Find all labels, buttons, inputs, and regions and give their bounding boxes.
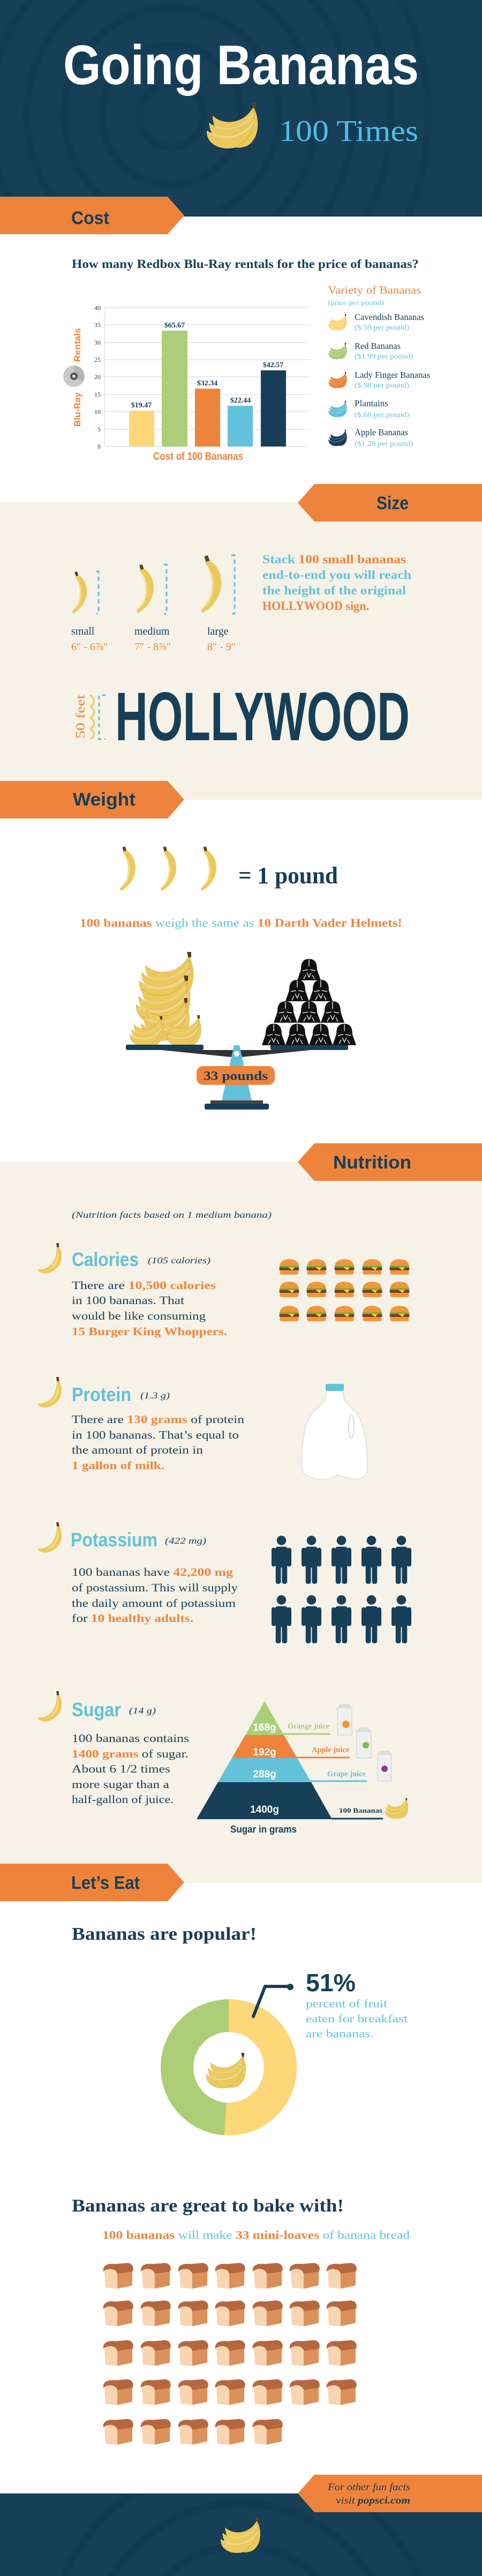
panel: potassium: 100 bananas have 42,200 mg [72,1566,234,1579]
three bananas = 1 pound [120,846,338,890]
chart: sugar pyramid: Sugar in grams [230,1824,297,1835]
callout: 51%: eaten for breakfast [306,2012,408,2025]
legend: variety of bananas: ($.98 per pound) [355,382,409,390]
panel: calories: (105 calories) [148,1255,210,1265]
banner: cost [0,197,184,234]
text: darth vader comparison: 100 bananas weigh the same as 10 Darth Vader Helmets! [80,916,402,929]
panel: sugar: About 6 1/2 times [72,1762,170,1775]
chart: sugar pyramid: Orange juice [288,1722,329,1731]
banner: size: Size [376,493,409,513]
icon: milk jug [302,1384,367,1479]
banner: weight: Weight [73,790,135,810]
banana sizes: 7″ - 8⅞″ [134,641,171,653]
bar chart: 15 [94,391,101,398]
panel: protein: the amount of protein in [72,1443,204,1456]
text: stack 100 small bananas: HOLLYWOOD sign. [262,599,369,613]
banana sizes: small [71,626,95,637]
panel: protein: (1.3 g) [140,1390,170,1401]
heading: bake: Bananas are great to bake with! [72,2196,344,2216]
banana sizes: medium [134,626,170,637]
chart: sugar pyramid: 288g [253,1769,276,1780]
hollywood sign: 50 feet [74,695,88,739]
text: stack 100 small bananas: end-to-end you will reach [262,568,411,582]
panel: sugar: (14 g) [129,1706,156,1716]
chart: sugar pyramid: 192g [253,1747,276,1758]
banner: footer source: For other fun facts [327,2482,410,2493]
scale illustration: 33 pounds [204,1069,268,1083]
heading: cost question: How many Redbox Blu-Ray rentals for the price of bananas? [72,257,419,271]
panel: protein: in 100 bananas. That’s equal to [72,1428,239,1441]
background: beige size [0,502,482,800]
donut chart [177,1984,293,2119]
panel: potassium: Potassium [71,1529,157,1551]
bar chart: 5 [97,426,101,433]
banner: weight [0,781,184,818]
legend: variety of bananas: Variety of Bananas [328,284,421,296]
panel: sugar: 100 bananas contains [72,1732,189,1745]
legend: variety of bananas [328,284,430,448]
axis label: Blu-Ray Rentals [63,328,85,427]
text: stack 100 small bananas: Stack 100 small bananas [262,553,406,566]
banner: let's eat: Let’s Eat [71,1873,140,1893]
panel: calories: Calories [72,1248,139,1270]
icons: juice cartons [337,1704,408,1819]
callout: 51%: 51% [306,1969,356,1997]
text: stack 100 small bananas [262,553,411,613]
callout: 51%: are bananas. [306,2027,374,2040]
chart: sugar pyramid: Apple juice [312,1746,349,1754]
bar chart [94,304,311,463]
three bananas = 1 pound: = 1 pound [238,862,338,889]
banner: footer source [298,2475,482,2512]
panel: protein: There are 130 grams of protein [72,1413,245,1426]
panel: potassium [37,1522,411,1643]
bar chart: $32.34 [197,379,217,388]
legend: variety of bananas: Cavendish Bananas [355,312,424,322]
axis label: Blu-Ray Rentals: Rentals [72,328,82,362]
panel: calories [37,1243,409,1338]
icon: header banana bunch [207,103,258,148]
banner: let's eat [0,1864,184,1901]
legend: variety of bananas: Plantains [355,398,388,408]
subtitle: 100 Times [279,115,418,148]
bar chart: 20 [94,373,101,381]
banana sizes: 6″ - 6⅞″ [71,641,108,653]
panel: potassium: (422 mg) [165,1536,206,1546]
chart: sugar pyramid: 1400g [250,1804,279,1815]
panel: sugar [37,1691,408,1835]
bar chart: 30 [94,339,101,346]
bar chart: $42.57 [263,361,283,369]
chart: sugar pyramid: Grape juice [327,1770,366,1778]
background: header [0,0,482,217]
banner: size [298,484,482,522]
banana sizes: large [207,626,229,637]
callout: 51%: percent of fruit [306,1997,387,2010]
bar chart: $19.47 [131,401,152,410]
banner: cost: Cost [71,208,109,228]
bar chart: $65.67 [164,322,185,330]
legend: variety of bananas: Red Bananas [355,341,401,351]
bar chart: Cost of 100 Bananas [153,451,243,463]
icon grid: burgers [280,1259,409,1321]
bar chart: 10 [94,408,101,415]
panel: sugar: 1400 grams of sugar. [72,1747,189,1760]
bar chart: 40 [94,304,101,311]
text: stack 100 small bananas: the height of the original [262,584,406,597]
banner: footer source: visit popsci.com [336,2495,410,2506]
panel: sugar: Sugar [72,1699,121,1721]
banana sizes: 8″ - 9″ [207,641,236,653]
banana sizes [71,555,236,653]
axis label: Blu-Ray Rentals: Blu-Ray [72,392,82,427]
bar chart: 35 [94,321,101,329]
background: footer [0,2493,482,2576]
title: Going Bananas [63,34,419,96]
panel: protein: Protein [72,1383,131,1405]
legend: variety of bananas: (price per pound) [328,299,384,307]
legend: variety of bananas: ($1.99 per pound) [355,353,413,361]
banner: nutrition: Nutrition [333,1152,411,1173]
banner: nutrition [298,1143,482,1181]
icon grid: bread loaves [103,2263,357,2445]
panel: calories: There are 10,500 calories [72,1279,216,1292]
bar chart: 0 [97,443,101,450]
panel: calories: 15 Burger King Whoppers. [72,1325,227,1338]
heading: bananas are popular: Bananas are popular! [72,1924,257,1944]
panel: sugar: more sugar than a [72,1778,170,1791]
panel: calories: would be like consuming [72,1309,206,1322]
bar chart: $22.44 [230,397,251,405]
panel: sugar: half-gallon of juice. [72,1793,174,1806]
chart: sugar pyramid [197,1701,408,1835]
panel: potassium: of postassium. This will supply [72,1581,238,1594]
panel: potassium: for 10 healthy adults. [72,1612,193,1625]
panel: protein [37,1377,367,1479]
legend: variety of bananas: ($.59 per pound) [355,324,409,332]
text: mini-loaves: 100 bananas will make 33 mini-loaves of banana bread [102,2228,410,2242]
callout: 51% [306,1969,408,2040]
legend: variety of bananas: Lady Finger Bananas [355,370,430,380]
icon: footer banana bunch [221,2518,260,2553]
note: nutrition facts basis: (Nutrition facts based on 1 medium banana) [72,1210,272,1220]
bar chart: 25 [94,356,101,363]
chart: sugar pyramid: 168g [253,1722,276,1733]
scale illustration [126,952,356,1110]
legend: variety of bananas: ($1.29 per pound) [355,440,413,448]
panel: calories: in 100 bananas. That [72,1294,184,1307]
panel: protein: 1 gallon of milk. [72,1459,164,1472]
icon grid: people [272,1536,411,1643]
background: beige nutrition [0,1162,482,1883]
legend: variety of bananas: Apple Bananas [355,427,408,437]
chart: sugar pyramid: 100 Bananas [339,1806,382,1814]
legend: variety of bananas: ($.68 per pound) [355,411,409,419]
panel: potassium: the daily amount of potassium [72,1597,236,1610]
